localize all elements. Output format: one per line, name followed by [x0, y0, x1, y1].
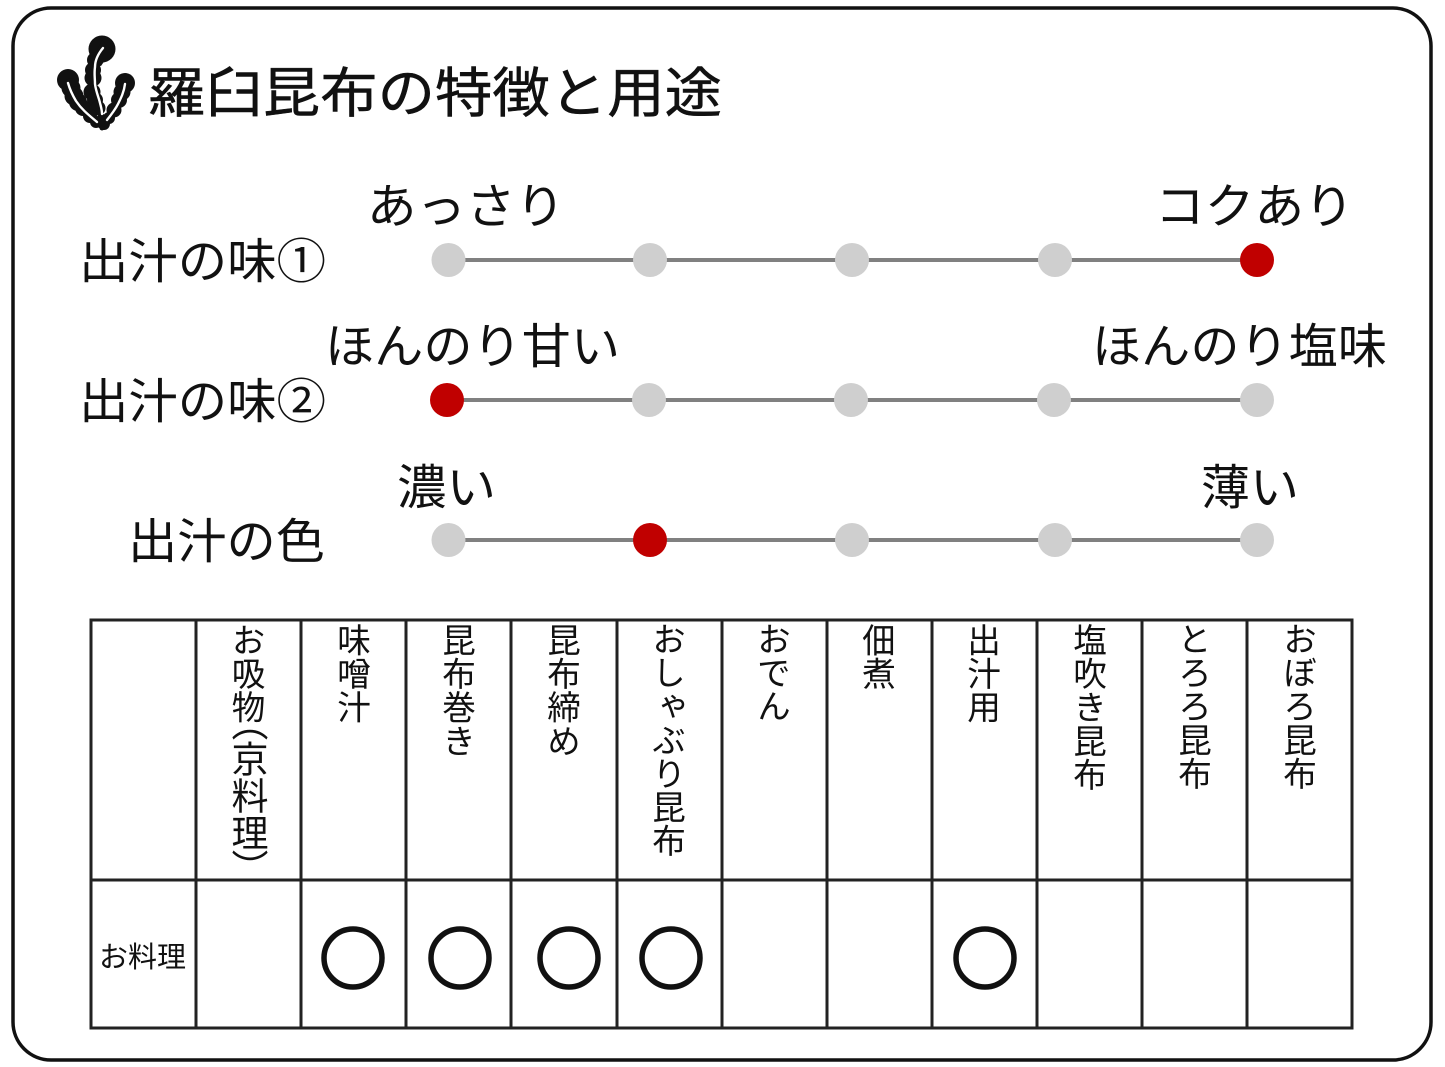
header: osuimono (Kyoto cuisine)	[226, 623, 268, 886]
column headers: 味噌汁	[332, 623, 369, 724]
left end label: ほんのり甘い	[325, 321, 620, 374]
header: osuimono (Kyoto cuisine): （	[226, 704, 268, 741]
title: 羅臼昆布の特徴と用途	[148, 64, 722, 124]
left end label: あっさり	[367, 181, 565, 234]
scale label: 出汁の色	[128, 516, 325, 569]
scale label: 出汁の味①	[79, 236, 326, 289]
column headers: 出汁用	[962, 623, 999, 724]
header: osuimono (Kyoto cuisine): 京料理	[226, 740, 268, 851]
column headers: おぼろ昆布	[1278, 622, 1315, 790]
circle marks	[324, 929, 1014, 987]
scale dots	[432, 243, 1274, 277]
column headers: おしゃぶり昆布	[646, 622, 685, 857]
scale: dashi colour	[128, 462, 1299, 569]
column headers: おでん	[752, 622, 788, 723]
table: dishes	[91, 620, 1352, 1028]
column headers: 昆布締め	[542, 623, 580, 757]
scale dots	[430, 383, 1274, 417]
scale dots	[432, 523, 1274, 557]
right end label: 薄い	[1201, 462, 1299, 515]
table grid	[91, 620, 1352, 1028]
left end label: 濃い	[397, 462, 496, 515]
scale line	[447, 398, 1257, 402]
header: osuimono (Kyoto cuisine): ）	[226, 849, 268, 886]
column headers: 塩吹き昆布	[1068, 623, 1105, 791]
scale: dashi flavor 2	[79, 321, 1387, 429]
row label: お料理	[99, 941, 186, 974]
scale: dashi flavor 1	[79, 181, 1354, 289]
scale label: 出汁の味②	[79, 376, 326, 429]
right end label: ほんのり塩味	[1092, 321, 1387, 374]
icon: kelp	[57, 36, 135, 130]
column headers: 佃煮	[856, 623, 895, 690]
header: osuimono (Kyoto cuisine): お吸物	[226, 623, 265, 724]
column headers: とろろ昆布	[1172, 622, 1210, 790]
scale line	[449, 538, 1257, 542]
column headers: 昆布巻き	[436, 623, 474, 757]
scale line	[449, 258, 1257, 262]
column headers	[226, 622, 1315, 886]
right end label: コクあり	[1155, 181, 1354, 234]
